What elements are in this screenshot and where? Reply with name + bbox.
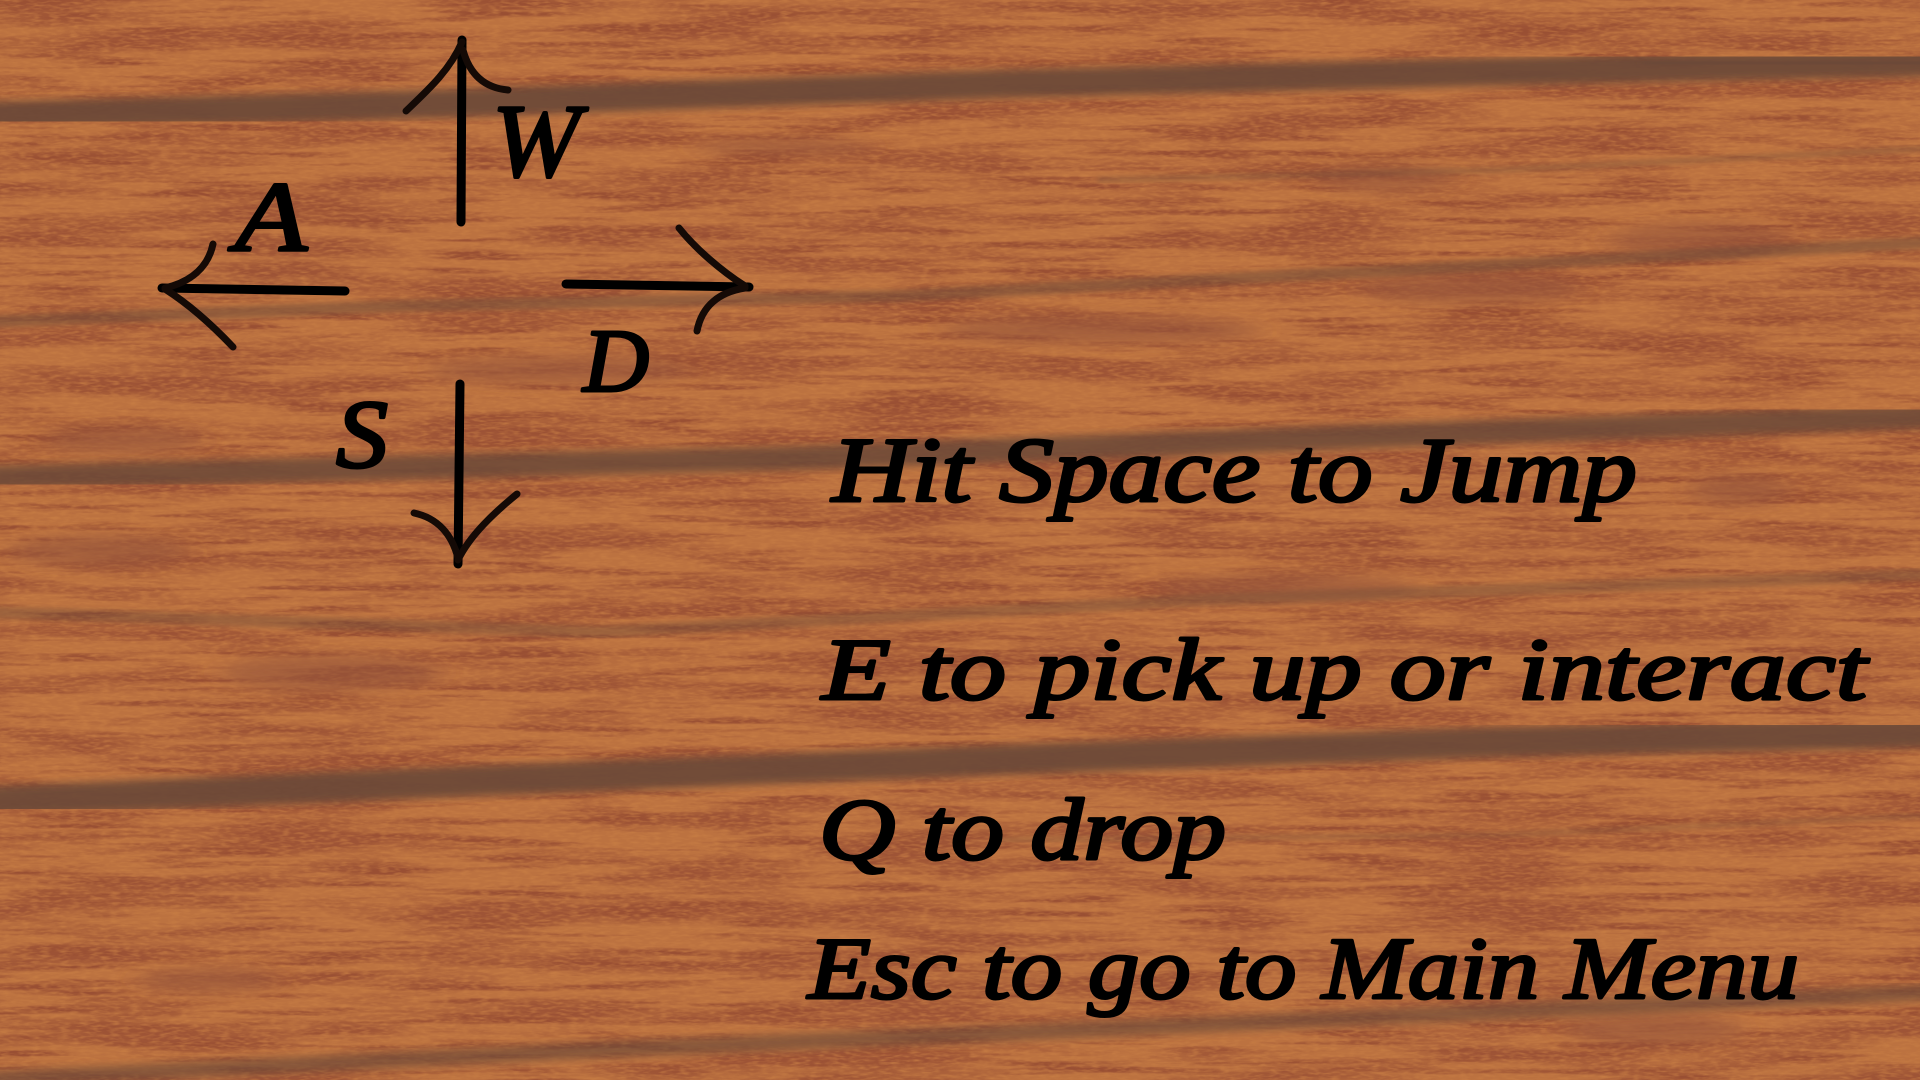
arrow: left (A) (162, 244, 345, 347)
key label: S: S (336, 381, 388, 489)
instruction: jump: Hit Space to Jump (831, 419, 1637, 521)
key label: D: D (581, 312, 649, 411)
key label: W: W (492, 84, 588, 199)
darker wood patches (8, 139, 1790, 1045)
arrow: up (W) (406, 40, 508, 222)
instruction: interact: E to pick up or interact (819, 622, 1870, 719)
instruction: drop: Q to drop (819, 782, 1226, 879)
arrow: down (S) (414, 384, 517, 564)
instruction: main menu: Esc to go to Main Menu (806, 921, 1799, 1018)
key label: A: A (228, 161, 308, 272)
arrow: right (D) (566, 228, 749, 331)
